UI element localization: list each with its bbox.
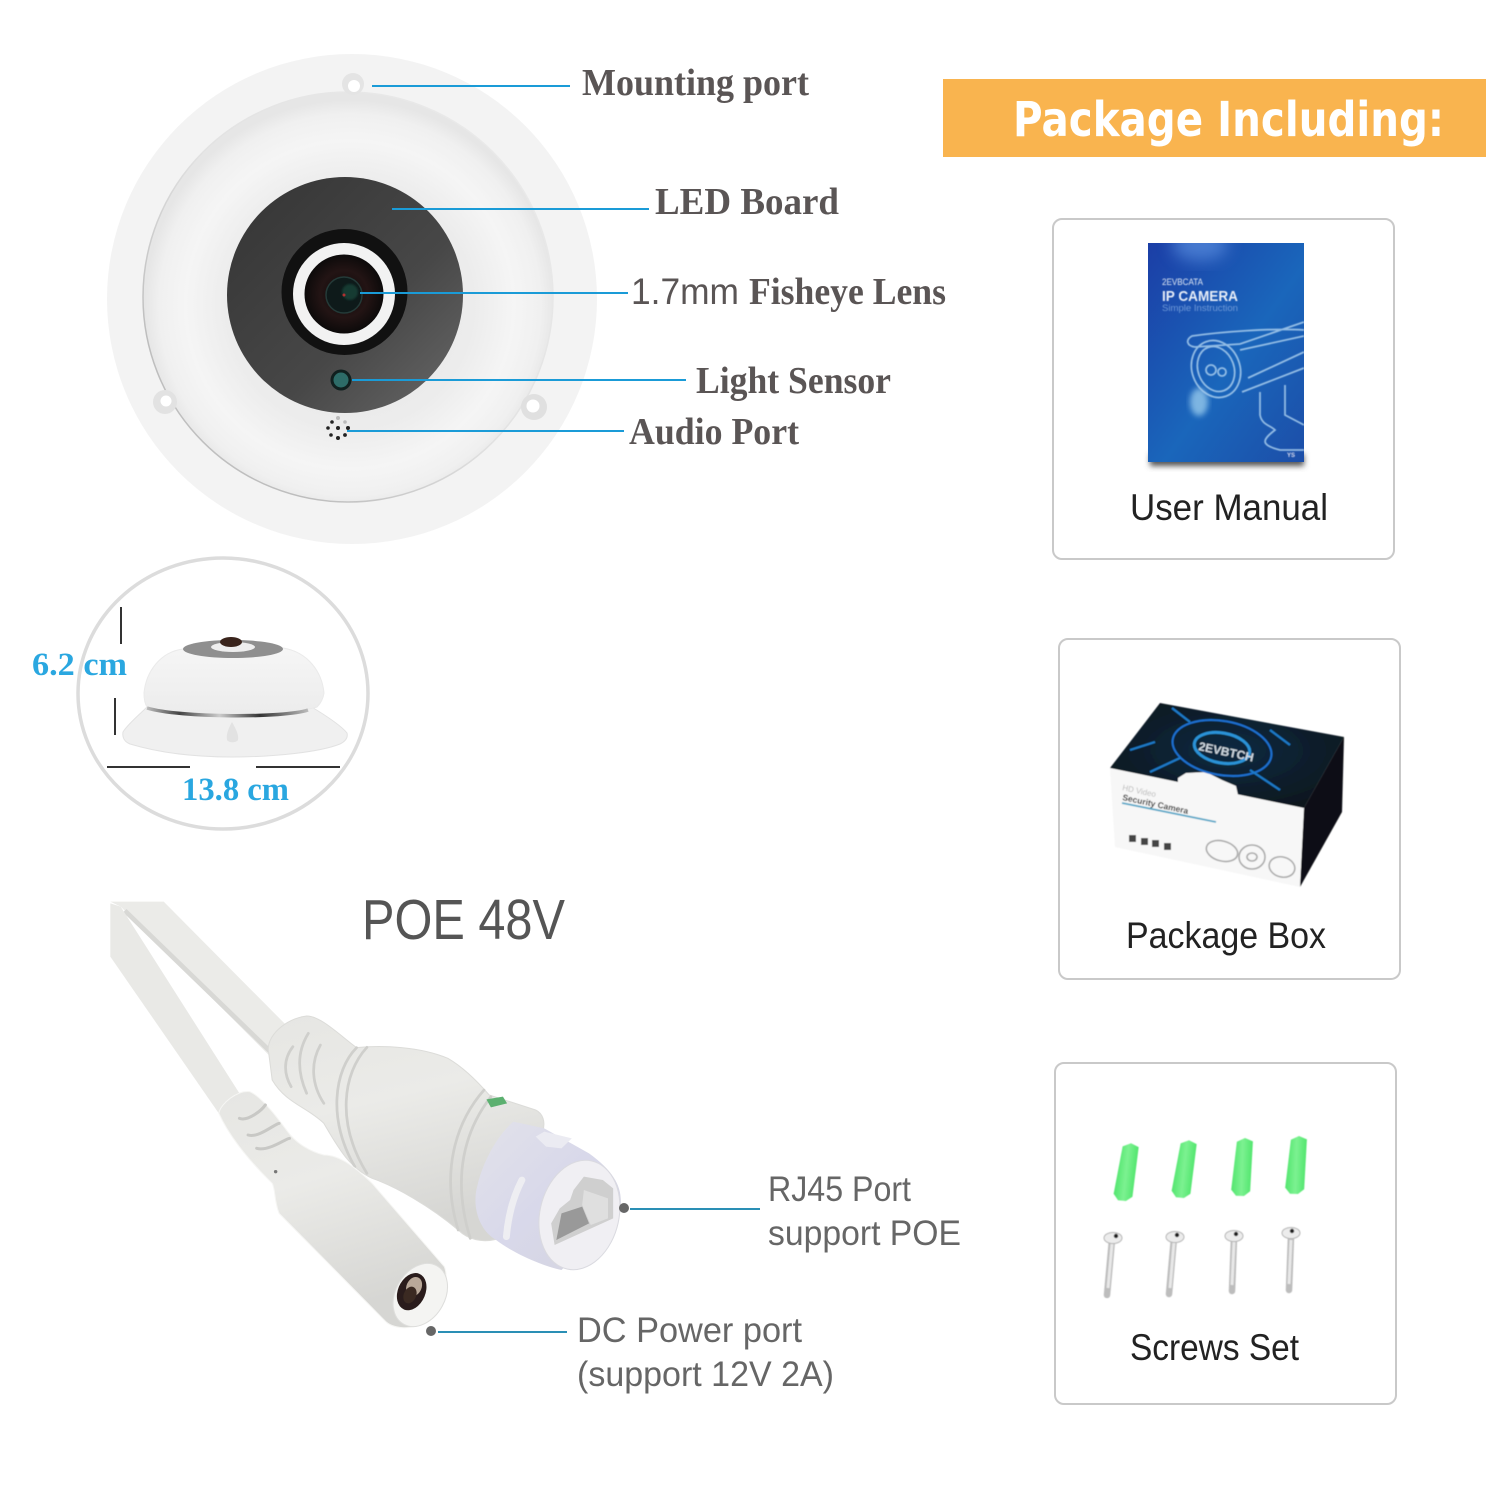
icon: mounting hole right [521, 394, 547, 420]
label: fisheye lens [631, 271, 946, 313]
small camera side view [123, 637, 347, 757]
upper cable wire [110, 902, 288, 1055]
label: mounting port: Mounting port [582, 62, 809, 104]
POE cable illustration [110, 902, 630, 1336]
label: fisheye lens: 1.7mm [631, 271, 739, 312]
label: width 13.8 cm: 13.8 cm [182, 772, 289, 808]
light sensor [330, 370, 352, 390]
box illustration: HD Video [1122, 783, 1157, 799]
audio port [326, 416, 350, 440]
heading: POE 48V: POE 48V [362, 888, 565, 952]
callout labels [582, 62, 946, 453]
DC power connector [219, 1092, 458, 1336]
callout: DC power port [426, 1311, 834, 1394]
lower cable wire [110, 903, 239, 1113]
manual cover: 2EVBCATA [1162, 277, 1203, 287]
screws [1104, 1228, 1300, 1295]
callout: DC power port: (support 12V 2A) [577, 1355, 834, 1394]
box illustration [1110, 703, 1344, 887]
fisheye lens [282, 229, 408, 355]
manual cover: IP CAMERA [1162, 288, 1238, 305]
label: package box: Package Box [1126, 915, 1326, 956]
LED indicator [486, 1097, 507, 1107]
label: screws set: Screws Set [1130, 1327, 1300, 1368]
label: LED board: LED Board [655, 181, 839, 223]
heading banner: package including [943, 79, 1486, 157]
manual cover: YS [1287, 453, 1295, 459]
dimension lines [107, 607, 340, 767]
manual cover: Simple Instruction [1162, 303, 1238, 314]
icon: mounting hole left [153, 390, 177, 414]
LED board plate [227, 177, 463, 413]
panel: screws set [1055, 1063, 1396, 1404]
wall anchors [1113, 1136, 1307, 1202]
manual shadow [1150, 454, 1304, 466]
panel: package box [1059, 639, 1400, 979]
panel: user manual [1053, 219, 1394, 559]
label: height 6.2 cm: 6.2 cm [32, 647, 127, 683]
callout: RJ45 port: RJ45 Port [768, 1170, 911, 1209]
callout: RJ45 port [619, 1170, 961, 1253]
icon: mounting hole top [342, 73, 364, 95]
label: fisheye lens: Fisheye Lens [749, 271, 946, 313]
box illustration: Security Camera [1122, 792, 1190, 816]
label: light sensor: Light Sensor [696, 360, 891, 402]
callout: DC power port: DC Power port [577, 1311, 802, 1350]
box illustration: 2EVBTCH [1197, 739, 1255, 765]
label: user manual: User Manual [1130, 487, 1328, 528]
callout lines [347, 86, 686, 431]
camera front view [107, 54, 597, 544]
label: audio port: Audio Port [629, 411, 799, 453]
manual cover [1148, 229, 1304, 462]
RJ45 connector [268, 1016, 630, 1277]
callout: RJ45 port: support POE [768, 1214, 961, 1253]
panel: dimensions side view [32, 558, 368, 829]
